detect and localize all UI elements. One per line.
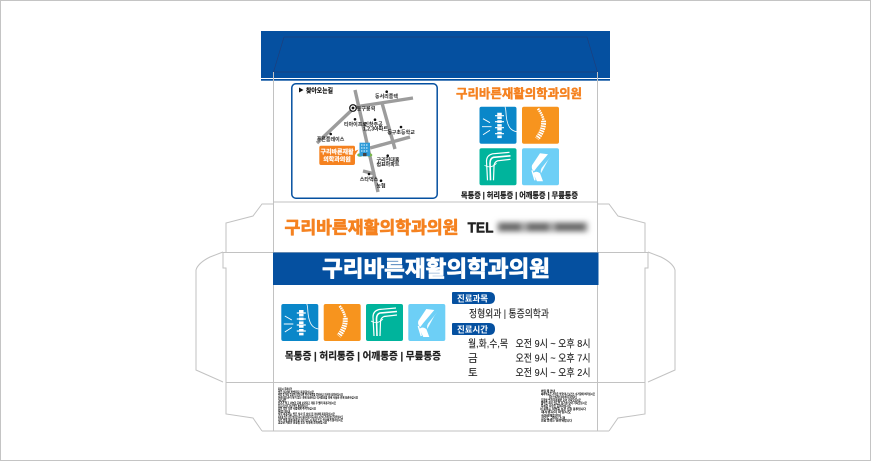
fine print: right: 재사용하지 마십시오	[541, 409, 571, 414]
hours rows: 토	[468, 367, 478, 379]
pill: departments: 진료과목	[457, 293, 488, 303]
blue title band	[273, 252, 598, 285]
hours rows	[468, 338, 590, 379]
map landmarks: 인창주공	[364, 121, 383, 128]
fine print: right: 진료 문의는 전화 바랍니다	[541, 418, 572, 422]
map heading	[299, 86, 333, 94]
clinic callout: 의학과의원	[323, 156, 351, 164]
icon: back pain	[522, 107, 559, 144]
icon: neck pain	[281, 304, 318, 341]
fine print: left: 어린이의 손이 닿지 않는 곳에 보관하고 직사광선을 피해 서늘한 곳에 보관하십시오	[278, 394, 358, 399]
fine print: left: 식후 복용하는 약은 식사 후 삼십 분 이내에 복용하십시오	[278, 411, 335, 416]
map landmarks	[317, 90, 415, 190]
hours rows: 오전 9시 ~ 오후 8시	[516, 338, 590, 350]
side strip clinic name: 구리바른재활의학과의원	[284, 218, 458, 238]
phone: TEL	[468, 220, 494, 236]
map roads	[317, 90, 413, 192]
fine print: right: 일반 쓰레기와 함께 버리지 마십시오	[549, 394, 577, 399]
fine print: left: 유효기간이 지난 약은 버리십시오	[278, 403, 308, 408]
icon: back pain	[324, 304, 361, 341]
map landmarks: 동구초등학교	[387, 129, 415, 136]
fine print: right: 경기도 구리시 소재	[541, 415, 565, 420]
fine print: right: 자세한 사항은 문의하십시오	[541, 403, 571, 408]
clinic callout: 구리바른재활	[320, 148, 354, 156]
phone	[468, 220, 588, 236]
map landmarks: 구리현대홈	[376, 156, 400, 164]
fine print: right: 구리바른재활의학과	[541, 412, 561, 418]
fine print: left	[278, 386, 358, 425]
fine print: left: 복용 중 이상 증상이 나타나면 즉시 복용을 중단하고 의사와 상의하십시오	[278, 392, 343, 397]
map landmarks: 스타벅스	[360, 176, 379, 183]
hours rows: 오전 9시 ~ 오후 2시	[516, 367, 590, 379]
fine print: left: 다른 약을 함께 복용할 경우 반드시 의사 또는 약사에게 알리십시오	[278, 417, 343, 422]
bottom pain labels: 목통증 | 허리통증 | 어깨통증 | 무릎통증	[285, 350, 441, 362]
map landmarks: 푸른플레이스	[317, 136, 345, 143]
map landmarks: 농협	[376, 182, 386, 190]
top pain labels: 목통증 | 허리통증 | 어깨통증 | 무릎통증	[461, 190, 579, 200]
panel: departments	[452, 292, 549, 320]
fine print: left: 복용시 주의사항	[278, 386, 292, 391]
map heading: 찾아오는길	[306, 86, 333, 94]
hours rows: 금	[468, 352, 478, 364]
panel: map	[292, 84, 437, 198]
fine print: left: 궁금한 사항은 진료실 또는 약국에 문의하십시오	[278, 420, 327, 425]
blue title band: 구리바른재활의학과의원	[322, 256, 550, 282]
fine print: right: 포장을 벗겨 내용물만 모아 가져오십시오	[541, 397, 581, 402]
map landmarks: 티아이프로	[344, 121, 367, 128]
fine print: left: 보관	[278, 397, 286, 402]
fine print: left: 남은 약은 다른 사람에게 주지 마십시오	[278, 406, 316, 411]
hours rows: 월,화,수,목	[468, 338, 508, 350]
pill: hours: 진료시간	[457, 324, 488, 334]
hours rows: 오전 9시 ~ 오후 7시	[516, 352, 590, 364]
fine print: right: 이 봉투는 의약품 보관 전용 봉투입니다	[540, 406, 586, 411]
fine print: left: 약은 의사의 처방대로 복용하십시오	[278, 389, 314, 394]
icon: clinic building	[357, 143, 372, 157]
fine print: right	[540, 388, 595, 422]
top clinic name: 구리바른재활의학과의원	[456, 86, 582, 101]
icon: shoulder pain	[366, 304, 403, 341]
map landmarks: 쉼표아파트	[376, 161, 400, 168]
dieline	[196, 72, 675, 431]
map landmarks: 1,2,3아파트	[363, 126, 388, 132]
icon: knee pain	[408, 304, 445, 341]
fine print: left: 습기가 적고 서늘한 곳에 보관하고 개봉 후 빨리 복용하십시오	[278, 400, 336, 405]
top flap: blue header	[261, 31, 610, 81]
icon: knee pain	[522, 148, 559, 185]
icon: shoulder pain	[480, 148, 516, 185]
map landmarks: 동서리플렉	[375, 93, 398, 100]
clinic callout	[319, 146, 358, 165]
fine print: left: 복약 안내	[278, 408, 290, 413]
panel: hours	[452, 323, 590, 379]
fine print: right: 폐의약품은 가까운 약국이나 보건소 수거함에 버리십시오	[541, 391, 595, 396]
blurred phone number	[497, 222, 588, 232]
fine print: right: 물약은 새지 않도록 용기를 닫아 가져오십시오	[541, 400, 587, 405]
map landmarks: 동구릉역	[357, 106, 376, 112]
fine print: left: 복용을 잊은 경우 생각난 즉시 복용하되 다음 복용 시간이 가까우면 건너뛰십시오	[278, 414, 343, 419]
icon: neck pain	[480, 107, 516, 144]
departments text: 정형외과 | 통증의학과	[469, 308, 549, 320]
fine print: right: 버릴 때 안내	[541, 388, 555, 393]
